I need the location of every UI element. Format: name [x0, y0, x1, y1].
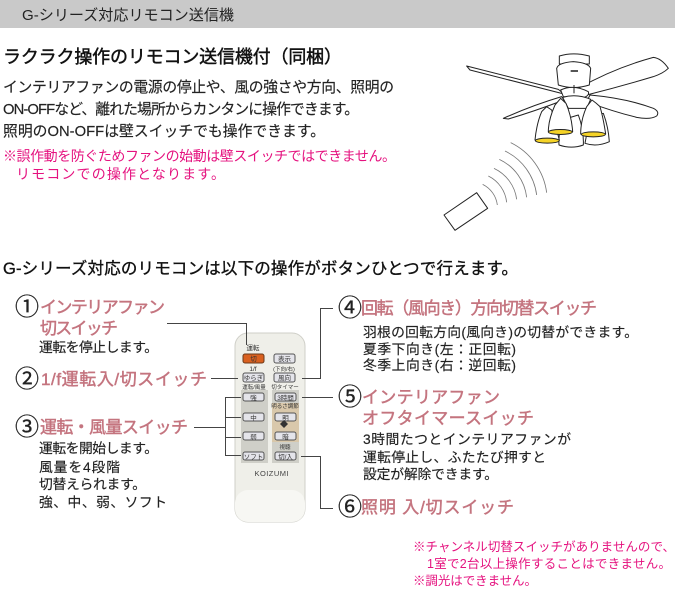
fan motor — [557, 54, 591, 108]
pink note — [3, 148, 396, 182]
remote control: 中 — [250, 413, 257, 422]
item 3: run and airflow switch: 運転を開始します。 — [39, 441, 158, 456]
remote control — [235, 333, 305, 522]
item 5: off timer switch — [338, 384, 571, 482]
remote control: 風向 — [278, 373, 291, 382]
remote control: 明るさ調節 — [271, 402, 299, 410]
remote control: 切タイマー — [271, 383, 299, 391]
item 1: fan off switch — [15, 294, 165, 355]
item 5: off timer switch: 設定が解除できます。 — [363, 467, 498, 482]
footnotes — [413, 539, 675, 588]
remote control: 切 — [250, 355, 257, 363]
item 4: rotation direction switch: 夏季下向き(左：正回転) — [363, 342, 516, 357]
leader lines — [167, 308, 333, 508]
item 2: 1/f switch — [15, 366, 207, 393]
item 6: light switch: ⑥ — [338, 494, 362, 521]
remote control: 切/入 — [278, 453, 293, 461]
item 4: rotation direction switch: ④ — [338, 295, 362, 322]
item 3: run and airflow switch: 運転・風量スイッチ — [40, 418, 188, 437]
remote control: 運転/風量 — [242, 383, 266, 391]
remote control: 3時間 — [277, 394, 294, 402]
item 4: rotation direction switch: 回転（風向き）方向切替スイッチ — [361, 299, 597, 318]
item 4: rotation direction switch: 羽根の回転方向(風向き)の切替ができます。 — [363, 325, 638, 340]
item 5: off timer switch: 運転停止し、ふたたび押すと — [363, 450, 546, 465]
item 3: run and airflow switch: 風量を4段階 — [39, 460, 120, 475]
item 3: run and airflow switch: 強、中、弱、ソフト — [39, 495, 167, 510]
item 1: fan off switch: インテリアファン — [40, 298, 165, 317]
intro text: 照明のON-OFFは壁スイッチでも操作できます。 — [3, 123, 325, 140]
item 1: fan off switch: 運転を停止します。 — [39, 340, 158, 355]
item 1: fan off switch: ① — [15, 294, 39, 321]
item 1: fan off switch: 切スイッチ — [40, 319, 118, 338]
remote control: 表示 — [278, 354, 292, 363]
section lead: G-シリーズ対応のリモコンは以下の操作がボタンひとつで行えます。 — [3, 259, 518, 278]
section title: ラクラク操作のリモコン送信機付（同梱） — [3, 47, 342, 67]
header title: G-シリーズ対応リモコン送信機 — [22, 7, 234, 24]
signal waves — [483, 143, 547, 205]
intro text — [3, 79, 394, 140]
item 3: run and airflow switch — [15, 414, 188, 510]
remote control: KOIZUMI — [254, 469, 288, 478]
remote control: 暗 — [282, 432, 289, 441]
item 3: run and airflow switch: ③ — [15, 414, 39, 441]
item 4: rotation direction switch — [338, 295, 638, 373]
remote control: (下向/右) — [273, 365, 295, 373]
remote control: 視聴 — [279, 443, 291, 451]
item 2: 1/f switch: ② — [15, 366, 39, 393]
remote outline — [444, 193, 488, 230]
remote control: 弱 — [250, 433, 257, 441]
footnotes: 1室で2台以上操作することはできません。 — [427, 556, 671, 571]
remote control: ソフト — [244, 453, 263, 461]
remote control: 強 — [250, 393, 257, 402]
item 2: 1/f switch: 1/f運転入/切スイッチ — [41, 370, 207, 389]
item 5: off timer switch: オフタイマースイッチ — [362, 409, 534, 428]
lamp shades — [535, 98, 609, 147]
intro text: インテリアファンの電源の停止や、風の強さや方向、照明の — [3, 79, 394, 96]
remote control: 明 — [282, 414, 289, 422]
pink note: リモコンでの操作となります。 — [16, 166, 225, 182]
header bar — [0, 0, 675, 28]
item 5: off timer switch: インテリアファン — [362, 388, 500, 407]
item 5: off timer switch: ⑤ — [338, 384, 362, 411]
remote control: ゆらぎ — [244, 373, 264, 382]
illustration: ceiling fan and remote signal — [444, 54, 668, 230]
footnotes: ※チャンネル切替スイッチがありませんので、 — [413, 539, 675, 554]
item 3: run and airflow switch: 切替えられます。 — [39, 477, 146, 492]
item 4: rotation direction switch: 冬季上向き(右：逆回転) — [363, 358, 516, 373]
intro text: ON-OFFなど、離れた場所からカンタンに操作できます。 — [3, 101, 359, 118]
remote control: 運転 — [246, 343, 260, 352]
item 6: light switch — [338, 494, 514, 521]
footnotes: ※調光はできません。 — [413, 574, 537, 588]
pink note: ※誤作動を防ぐためファンの始動は壁スイッチではできません。 — [3, 148, 396, 164]
item 5: off timer switch: 3時間たつとインテリアファンが — [363, 432, 571, 447]
remote control: 1/f — [249, 366, 257, 373]
fan blades — [467, 57, 668, 119]
item 6: light switch: 照明 入/切スイッチ — [361, 498, 514, 517]
